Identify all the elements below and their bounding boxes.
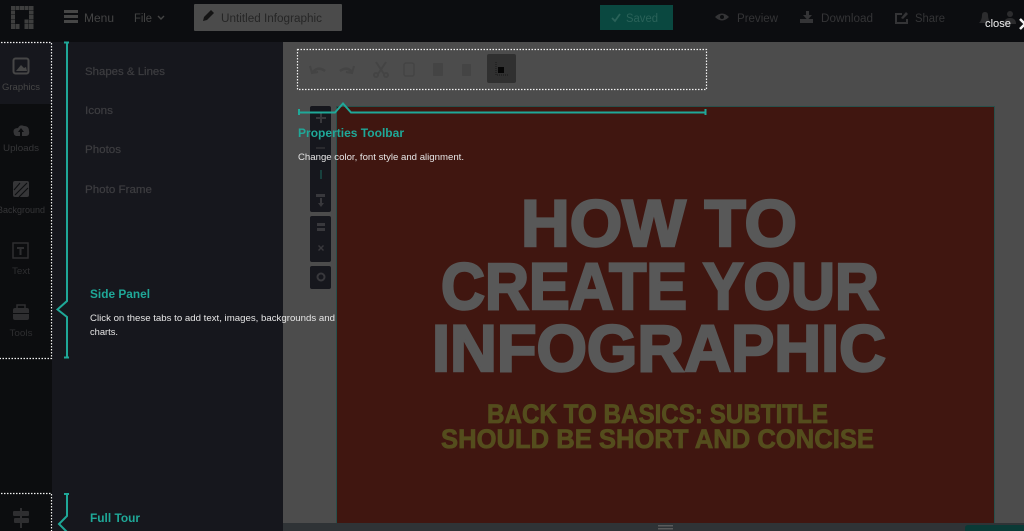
- bracket: full tour: [59, 494, 69, 531]
- callout: full tour: Full Tour: [90, 511, 140, 525]
- properties toolbar: [310, 54, 516, 83]
- menu label: Menu: [84, 13, 114, 25]
- tab: text: Text: [12, 266, 30, 277]
- side panel: [52, 42, 283, 531]
- tab: tools: [10, 305, 33, 339]
- tab: tools: Tools: [10, 328, 33, 339]
- canvas title: CREATE YOUR: [441, 249, 879, 323]
- icon: undo and redo: [310, 66, 354, 73]
- file menu: [134, 13, 164, 25]
- canvas title: HOW TO: [521, 186, 797, 260]
- bracket: properties toolbar: [299, 104, 706, 115]
- canvas subtitle: [441, 399, 874, 454]
- download action: Download: [821, 13, 873, 25]
- callout: properties toolbar: Properties Toolbar: [298, 126, 404, 140]
- callout: side panel: [90, 287, 335, 338]
- icon: copy: [404, 63, 414, 76]
- download action: [800, 11, 873, 25]
- callout: side panel: charts.: [90, 327, 118, 338]
- bracket: side panel: [58, 42, 69, 358]
- side panel items: Photo Frame: [85, 184, 152, 196]
- bottom status strip: [283, 523, 1024, 531]
- share action: [895, 12, 945, 25]
- icon: menu: [64, 10, 78, 23]
- icon: delete: [462, 64, 471, 76]
- icon: logo: [11, 6, 34, 29]
- icon: layer position button: [487, 54, 516, 83]
- canvas subtitle: SHOULD BE SHORT AND CONCISE: [441, 424, 874, 454]
- preview action: Preview: [737, 13, 779, 25]
- top navigation bar: [0, 0, 1024, 42]
- callout: side panel: Side Panel: [90, 287, 150, 301]
- file menu: File: [134, 13, 152, 25]
- canvas title: INFOGRAPHIC: [432, 311, 886, 385]
- highlight: properties toolbar: [298, 50, 706, 90]
- share action: Share: [915, 13, 945, 25]
- side panel items: [85, 66, 166, 196]
- tab: background: [0, 181, 45, 216]
- side panel items: Icons: [85, 105, 114, 117]
- workspace background: [283, 42, 1024, 531]
- tab: uploads: [3, 125, 39, 154]
- close button: [985, 18, 1024, 30]
- toolbar icons: [316, 113, 326, 280]
- close button: close: [985, 18, 1011, 30]
- icon: paste: [433, 63, 443, 76]
- saved button: Saved: [626, 13, 658, 25]
- callout: side panel: Click on these tabs to add text, images, backgrounds and: [90, 313, 335, 324]
- side panel items: Shapes & Lines: [85, 66, 166, 78]
- document title field: Untitled Infographic: [221, 13, 322, 25]
- tab: text: [12, 243, 30, 277]
- callout: properties toolbar: [298, 126, 464, 163]
- saved button: [600, 5, 673, 30]
- active tab: graphics: [0, 42, 52, 104]
- tab: uploads: Uploads: [3, 143, 39, 154]
- infographic canvas: [336, 106, 995, 524]
- highlight: side panel tabs: [0, 42, 52, 358]
- preview action: [715, 13, 779, 25]
- callout: properties toolbar: Change color, font style and alignment.: [298, 152, 464, 163]
- side panel items: Photos: [85, 144, 122, 156]
- canvas subtitle: BACK TO BASICS: SUBTITLE: [487, 399, 828, 429]
- highlight: full tour tab: [0, 494, 52, 531]
- left tab rail: [0, 42, 52, 531]
- canvas title: [432, 186, 886, 385]
- active tab: graphics: Graphics: [2, 82, 40, 93]
- zoom and arrange toolbar: [310, 106, 331, 289]
- tab: full tour icon: [13, 508, 29, 528]
- icon: notifications and user: [979, 11, 1016, 24]
- icon: cut: [374, 62, 388, 77]
- document title field: [194, 4, 342, 31]
